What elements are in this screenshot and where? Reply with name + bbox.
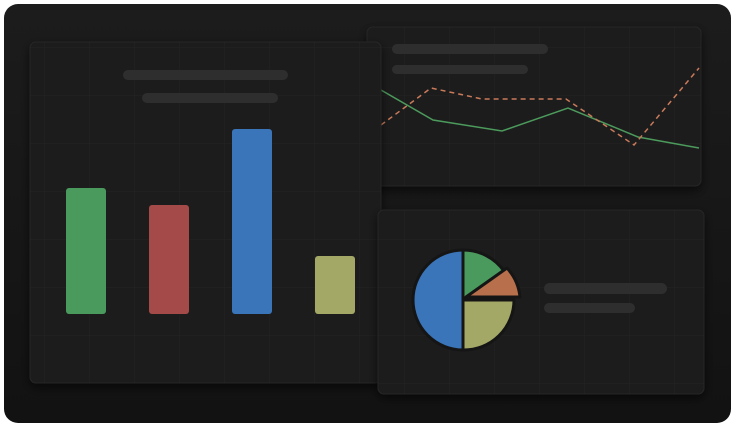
pie legend placeholder: [544, 283, 667, 313]
bar chart title placeholder: [123, 70, 288, 103]
pie chart: [413, 250, 520, 350]
line: green: [381, 90, 699, 148]
line: orange dashed: [381, 68, 699, 145]
panel: pie chart: [378, 210, 704, 394]
panel: line chart: [367, 27, 701, 186]
bar: olive: [315, 256, 355, 314]
bar: blue: [232, 129, 272, 314]
line chart title placeholder: [392, 44, 548, 74]
bar: green: [66, 188, 106, 314]
bar: red: [149, 205, 189, 314]
panel: bar chart: [30, 42, 381, 383]
